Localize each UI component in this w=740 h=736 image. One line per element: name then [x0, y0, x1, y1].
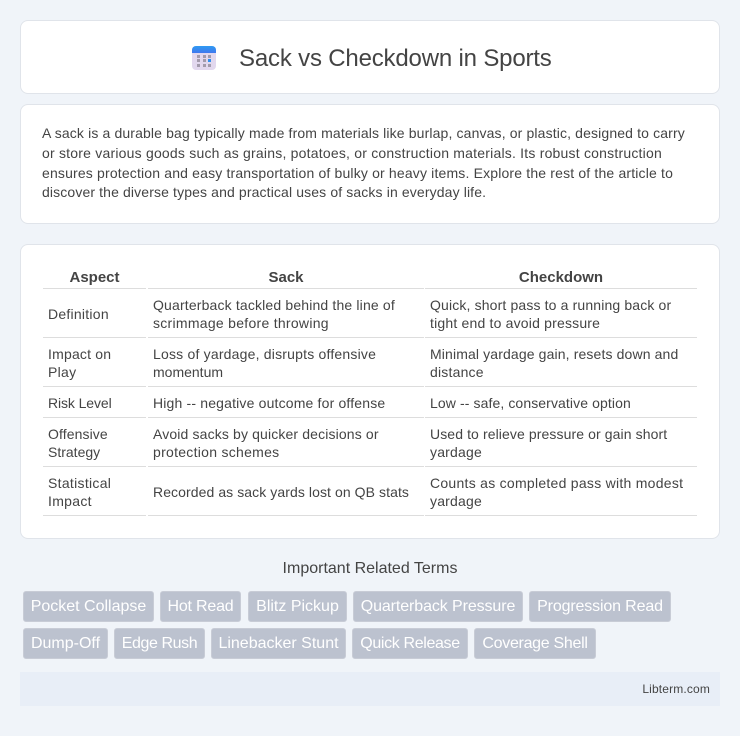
intro text	[42, 125, 685, 200]
tag: Pocket Collapse	[31, 598, 146, 615]
intro panel	[20, 104, 720, 224]
row: Offensive Strategy: Used to relieve pressure or gain short	[430, 426, 667, 442]
tag	[352, 628, 468, 659]
table header: Checkdown	[519, 269, 603, 286]
row: Definition: Definition	[48, 306, 109, 322]
row: Impact on Play: momentum	[153, 364, 223, 380]
tag	[353, 591, 523, 622]
row: Impact on Play: Minimal yardage gain, resets down and	[430, 346, 678, 362]
related terms tags	[23, 591, 671, 659]
row: Risk Level	[48, 395, 631, 411]
footer credit: Libterm.com	[642, 682, 710, 696]
intro text: A sack is a durable bag typically made from materials like burlap, canvas, or plastic, designed to carry	[42, 125, 685, 141]
row: Impact on Play: Play	[48, 364, 76, 380]
tag: Coverage Shell	[482, 635, 588, 652]
row: Statistical Impact: Counts as completed pass with modest	[430, 475, 683, 491]
row: Impact on Play: Loss of yardage, disrupts offensive	[153, 346, 376, 362]
row: Statistical Impact: Statistical	[48, 475, 111, 491]
row: Definition: Quarterback tackled behind the line of	[153, 297, 395, 313]
tag	[474, 628, 596, 659]
intro text: ensures protection and easy transportation of bulky or heavy items. Explore the rest of the article to	[42, 165, 673, 181]
tag	[211, 628, 346, 659]
table header: Sack	[268, 269, 304, 286]
tag	[114, 628, 205, 659]
row: Impact on Play: Impact on	[48, 346, 111, 362]
row: Impact on Play	[48, 346, 678, 380]
comparison table panel	[20, 244, 720, 539]
table header: Aspect	[69, 269, 120, 286]
row: Offensive Strategy: protection schemes	[153, 444, 279, 460]
row: Definition: tight end to avoid pressure	[430, 315, 600, 331]
tag: Quick Release	[360, 635, 460, 652]
row: Definition: scrimmage before throwing	[153, 315, 329, 331]
intro text: or store various goods such as grains, potatoes, or construction materials. Its robust construction	[42, 145, 662, 161]
tag	[160, 591, 241, 622]
row: Offensive Strategy: yardage	[430, 444, 482, 460]
tag: Dump-Off	[31, 635, 100, 652]
tag	[23, 591, 154, 622]
tag	[529, 591, 671, 622]
tag: Hot Read	[168, 598, 234, 615]
related terms heading: Important Related Terms	[283, 560, 457, 577]
footer bar	[20, 672, 720, 706]
row: Risk Level: Risk Level	[48, 395, 112, 411]
tag: Edge Rush	[122, 635, 197, 652]
row: Statistical Impact: Recorded as sack yards lost on QB stats	[153, 484, 409, 500]
table header	[69, 269, 603, 286]
title: Sack vs Checkdown in Sports	[239, 45, 552, 72]
row: Risk Level: High -- negative outcome for offense	[153, 395, 385, 411]
tag: Blitz Pickup	[256, 598, 339, 615]
intro text: discover the diverse types and practical uses of sacks in everyday life.	[42, 184, 486, 200]
row: Offensive Strategy	[48, 426, 668, 460]
tag: Progression Read	[537, 598, 663, 615]
icon: calendar	[192, 46, 216, 70]
tag	[248, 591, 347, 622]
row: Offensive Strategy: Offensive	[48, 426, 108, 442]
row: Offensive Strategy: Avoid sacks by quicker decisions or	[153, 426, 379, 442]
tag: Quarterback Pressure	[361, 598, 515, 615]
row: Definition	[48, 297, 671, 331]
tag: Linebacker Stunt	[218, 635, 339, 652]
row: Impact on Play: distance	[430, 364, 484, 380]
tag	[23, 628, 108, 659]
row: Definition: Quick, short pass to a running back or	[430, 297, 671, 313]
row: Statistical Impact: yardage	[430, 493, 482, 509]
row: Risk Level: Low -- safe, conservative option	[430, 395, 631, 411]
row: Statistical Impact	[48, 475, 683, 509]
row: Offensive Strategy: Strategy	[48, 444, 100, 460]
header panel	[20, 20, 720, 94]
row: Statistical Impact: Impact	[48, 493, 92, 509]
